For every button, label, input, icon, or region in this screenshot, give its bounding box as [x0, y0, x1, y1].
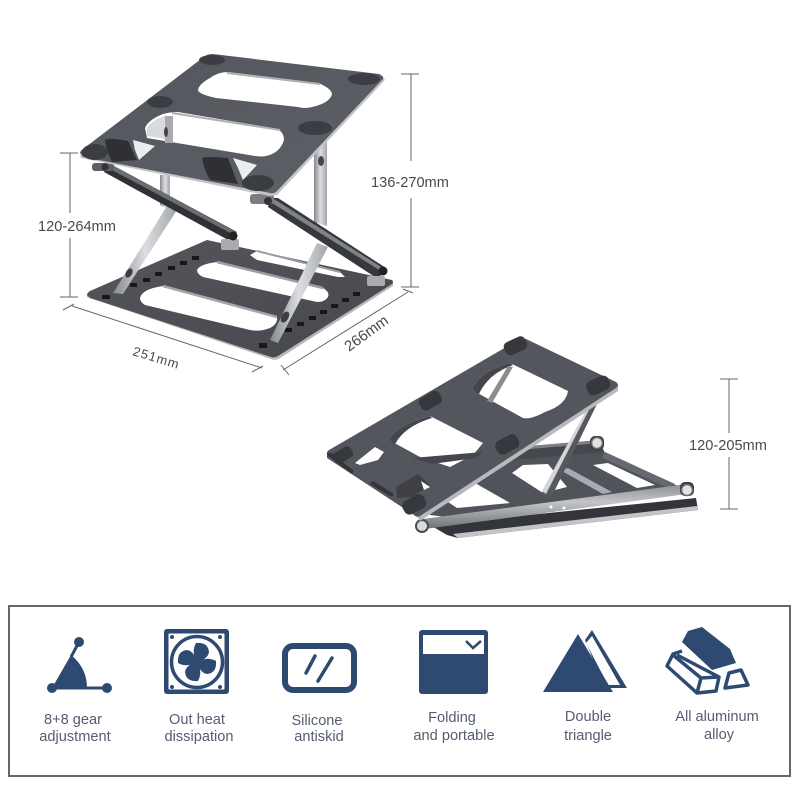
features panel — [9, 606, 790, 776]
rear vertical supports — [160, 136, 327, 226]
dimension: 120-205mm: 120-205mm — [689, 438, 767, 454]
top plate — [80, 54, 385, 196]
feature: 8+8 gear adjustment: 8+8 gear — [44, 712, 102, 728]
fold-out clips — [105, 139, 238, 184]
icon: two triangles — [543, 630, 627, 692]
feature: double triangle: Double — [565, 709, 611, 725]
feature: double triangle — [543, 630, 627, 744]
feature: silicone antiskid — [285, 646, 354, 745]
icon: gear sector — [47, 637, 112, 693]
dimension: 120-205mm — [689, 379, 767, 509]
feature: out heat dissipation — [164, 629, 233, 745]
icon: folding panel — [419, 630, 488, 694]
dimension: 120-264mm — [38, 153, 116, 297]
base frame — [412, 436, 698, 538]
icon: alloy ingots — [667, 627, 748, 693]
feature: folding and portable: Folding — [428, 710, 476, 726]
feature: folding and portable — [413, 630, 495, 744]
dimension: 136-270mm: 136-270mm — [371, 175, 449, 191]
feature: silicone antiskid: antiskid — [294, 729, 344, 745]
dimension: 251mm — [63, 304, 263, 372]
feature: all aluminum alloy — [667, 627, 759, 743]
support legs — [463, 402, 598, 500]
dimension: 136-270mm — [371, 74, 449, 287]
feature: out heat dissipation: Out heat — [169, 712, 225, 728]
feature: 8+8 gear adjustment: adjustment — [39, 729, 111, 745]
base plate — [87, 240, 393, 360]
feature: folding and portable: and portable — [413, 728, 495, 744]
feature: 8+8 gear adjustment — [39, 637, 112, 745]
dimension: 266mm: 266mm — [341, 312, 392, 355]
feature: all aluminum alloy: alloy — [704, 727, 735, 743]
feature: double triangle: triangle — [564, 728, 612, 744]
tilted top plate — [327, 335, 618, 521]
feature: all aluminum alloy: All aluminum — [675, 709, 759, 725]
dimension: 120-264mm: 120-264mm — [38, 219, 116, 235]
icon: silicone pad — [285, 646, 354, 690]
dimension: 266mm — [281, 289, 413, 375]
dimension: 251mm: 251mm — [131, 344, 182, 372]
upper stand: adjustable double-layer laptop stand — [80, 54, 393, 360]
icon: fan — [164, 629, 229, 694]
feature: silicone antiskid: Silicone — [291, 713, 343, 729]
feature: out heat dissipation: dissipation — [165, 729, 233, 745]
anti-slip pads — [331, 335, 612, 517]
scissor arms — [92, 162, 388, 343]
anti-slip pads — [82, 55, 380, 191]
lower stand: folded single-layer view — [327, 335, 698, 538]
